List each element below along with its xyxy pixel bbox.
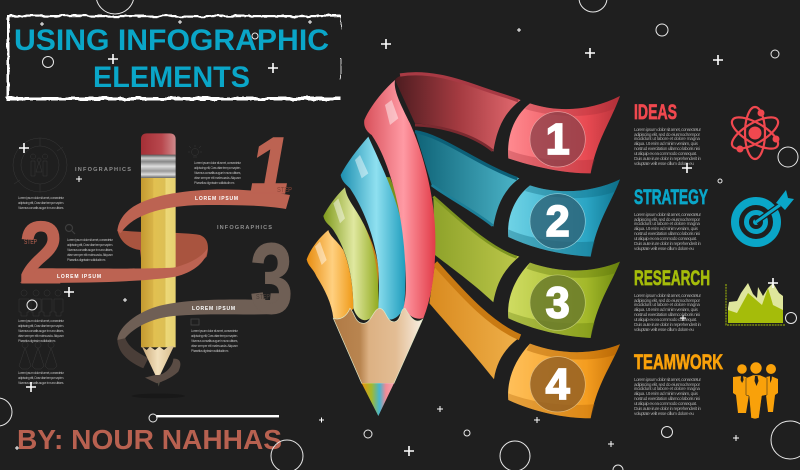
text: research: incididunt ut labore et dolore magna	[634, 302, 700, 307]
flag four	[508, 344, 620, 418]
small text block: step one	[194, 161, 242, 185]
pencil shadow	[132, 394, 185, 398]
pencil eraser	[141, 133, 176, 155]
text: strategy	[634, 212, 701, 251]
ribbon labels: LOREM IPSUM	[195, 196, 238, 202]
icon: four people outlines	[19, 290, 63, 316]
text: strategy: adipiscing elit, sed do eiusmod tempor	[634, 217, 700, 222]
step labels: STEP	[256, 294, 270, 301]
text: ideas: ut aliquip ex ea commodo consequat.	[634, 151, 697, 156]
small text block: left middle: Phasellus dignissim sollicitudin ex.	[18, 339, 56, 343]
step labels: STEP	[24, 239, 37, 246]
small text block: left bottom: adipiscing elit, Cras vitae tempor sapien.	[18, 376, 64, 380]
text: research: aliqua. Ut enim ad minim veniam, quis	[634, 307, 699, 312]
text: ideas: nostrud exercitation ullamco laboris nisi	[634, 146, 700, 151]
text: ideas: aliqua. Ut enim ad minim veniam, quis	[634, 141, 699, 146]
heading: teamwork: TEAMWORK	[634, 351, 723, 374]
green tail	[433, 197, 519, 302]
big pencil with ribbons	[307, 73, 620, 418]
blue tail	[415, 131, 519, 227]
small text block: step two	[67, 238, 114, 262]
text: teamwork: adipiscing elit, sed do eiusmod tempor	[634, 382, 700, 387]
text: research: nostrud exercitation ullamco laboris nisi	[634, 312, 700, 317]
ribbon two	[20, 248, 207, 283]
numeral one: 1	[250, 121, 290, 210]
small text block: step two: Lorem ipsum dolor sit amet, consectetur	[67, 238, 114, 242]
small text block: step one: adipiscing elit, Cras vitae tempor sapien.	[194, 166, 241, 170]
flag one: 1	[546, 116, 570, 164]
small text block: step three	[191, 329, 239, 353]
small text block: top left: Vivamus convallis augue in nunc ultrices.	[18, 206, 64, 210]
ribbon labels: LOREM IPSUM	[192, 306, 235, 312]
pencil wood	[333, 308, 423, 383]
ribbon wrap behind pencil	[117, 230, 208, 277]
red tail	[395, 73, 521, 152]
ribbon three end curl	[145, 359, 180, 383]
icon: team	[733, 362, 778, 419]
icon: three people outlines	[19, 342, 57, 369]
text: ideas: adipiscing elit, sed do eiusmod tempor	[634, 132, 700, 137]
small text block: left middle: vitae semper elit malesuada. Aliquam	[18, 334, 64, 338]
text: research: adipiscing elit, sed do eiusmod tempor	[634, 298, 700, 303]
author: BY: NOUR NAHHAS	[17, 424, 282, 455]
heading: ideas: IDEAS	[634, 101, 677, 124]
blue ribbon	[341, 137, 405, 320]
author line	[156, 415, 279, 417]
pencil lead	[155, 375, 162, 387]
text: teamwork: incididunt ut labore et dolore magna	[634, 386, 700, 391]
text: research: Lorem ipsum dolor sit amet, consectetur	[634, 293, 701, 298]
step labels: STEP	[277, 187, 292, 194]
icon: speech box	[191, 319, 199, 325]
icon: target	[735, 190, 794, 243]
pencil tip	[362, 383, 394, 416]
text: strategy: Duis aute irure dolor in reprehenderit in	[634, 241, 701, 246]
small text block: step three: Lorem ipsum dolor sit amet, consectetur	[191, 329, 239, 333]
small text block: top left	[18, 196, 65, 210]
pencil body	[141, 177, 176, 347]
heading: strategy: STRATEGY	[634, 186, 708, 209]
icon: magnifier	[66, 224, 75, 234]
flag two: 2	[546, 198, 570, 246]
small text block: left bottom	[18, 371, 65, 385]
small text block: left middle: Vivamus convallis augue in nunc ultrices,	[18, 329, 64, 333]
small text block: step three: Phasellus dignissim sollicitudin ex.	[191, 349, 229, 353]
title	[14, 24, 329, 94]
icon: bulb	[188, 145, 202, 157]
text: research: voluptate velit esse cillum dolore eu	[634, 327, 694, 332]
ribbon labels	[57, 196, 238, 312]
pencil ferrule	[141, 155, 176, 178]
small text block: left middle: adipiscing elit, Cras vitae tempor sapien.	[18, 324, 64, 328]
text: teamwork: voluptate velit esse cillum dolore eu	[634, 411, 694, 416]
title: USING INFOGRAPHIC	[14, 24, 329, 57]
orange tail	[429, 263, 520, 379]
infographics labels: INFOGRAPHICS	[75, 167, 131, 173]
text: teamwork: ut aliquip ex ea commodo consequat.	[634, 401, 697, 406]
flag one	[508, 96, 620, 173]
green ribbon back	[383, 177, 404, 230]
ribbon highlights	[315, 100, 398, 265]
small text block: step one: Vivamus convallis augue in nunc ultrices,	[194, 171, 241, 175]
text: ideas: voluptate velit esse cillum dolore eu	[634, 161, 694, 166]
text: teamwork: nostrud exercitation ullamco laboris nisi	[634, 396, 700, 401]
flag three	[508, 262, 620, 338]
small text block: left middle: Lorem ipsum dolor sit amet, consectetur	[18, 319, 65, 323]
text: teamwork: Duis aute irure dolor in reprehenderit in	[634, 406, 701, 411]
text: teamwork: aliqua. Ut enim ad minim veniam, quis	[634, 391, 699, 396]
icon: atom	[727, 107, 783, 159]
infographics labels	[75, 167, 272, 231]
text: strategy: ut aliquip ex ea commodo consequat.	[634, 236, 697, 241]
small text block: step two: vitae semper elit malesuada. Aliquam	[67, 253, 113, 257]
text: research: Duis aute irure dolor in reprehenderit in	[634, 322, 701, 327]
text: strategy: Lorem ipsum dolor sit amet, consectetur	[634, 212, 701, 217]
left pencil with step ribbons	[20, 133, 290, 398]
step labels	[24, 187, 292, 301]
text: strategy: nostrud exercitation ullamco laboris nisi	[634, 231, 700, 236]
small text block: step three: vitae semper elit malesuada. Aliquam	[191, 344, 238, 348]
flag four: 4	[546, 361, 570, 409]
numeral three: 3	[250, 223, 293, 335]
small text block: step three: Vivamus convallis augue in nunc ultrices,	[191, 339, 238, 343]
small text block: left bottom: Lorem ipsum dolor sit amet, consectetur	[18, 371, 65, 375]
text: strategy: voluptate velit esse cillum dolore eu	[634, 246, 694, 251]
text: ideas: Duis aute irure dolor in reprehenderit in	[634, 156, 701, 161]
green ribbon	[323, 187, 378, 320]
small text block: step two: adipiscing elit, Cras vitae tempor sapien.	[67, 243, 113, 247]
orange ribbon	[307, 230, 353, 319]
ribbon one	[117, 190, 290, 233]
small text block: step one: vitae semper elit malesuada. Aliquam	[194, 176, 241, 180]
text: research	[634, 293, 701, 332]
title: ELEMENTS	[93, 61, 250, 94]
text: teamwork	[634, 377, 701, 416]
small text block: step one: Phasellus dignissim sollicitudin ex.	[194, 181, 235, 185]
small text block: step two: Phasellus dignissim sollicitudin ex.	[67, 258, 106, 262]
small text block: top left: Lorem ipsum dolor sit amet, consectetur	[18, 196, 65, 200]
icon: circular people diagram	[13, 138, 67, 192]
red ribbon	[364, 80, 435, 319]
taupe ribbon wrap behind pencil	[117, 337, 148, 368]
text: ideas: incididunt ut labore et dolore magna	[634, 136, 700, 141]
title frame	[6, 15, 341, 100]
ribbon three	[117, 293, 289, 340]
ribbon labels: LOREM IPSUM	[57, 274, 101, 280]
text: strategy: incididunt ut labore et dolore magna	[634, 221, 700, 226]
small text block: step three: adipiscing elit, Cras vitae tempor sapien.	[191, 334, 238, 338]
text: ideas	[634, 127, 701, 166]
flag three: 3	[546, 279, 570, 327]
flag two	[508, 179, 620, 257]
small text block: top left: adipiscing elit, Cras vitae tempor sapien.	[18, 201, 64, 205]
infographics labels: INFOGRAPHICS	[217, 225, 272, 231]
heading: research: RESEARCH	[634, 267, 710, 290]
small text block: left middle	[18, 319, 65, 343]
small text block: step two: Vivamus convallis augue in nunc ultrices,	[67, 248, 113, 252]
pencil wood tip	[142, 346, 174, 377]
numeral two: 2	[19, 203, 63, 302]
small text block: left bottom: Vivamus convallis augue in nunc ultrices.	[18, 381, 64, 385]
orange ribbon back	[363, 223, 379, 308]
text: teamwork: Lorem ipsum dolor sit amet, consectetur	[634, 377, 701, 382]
small text block: step one: Lorem ipsum dolor sit amet, consectetur	[194, 161, 242, 165]
text: strategy: aliqua. Ut enim ad minim veniam, quis	[634, 226, 699, 231]
text: research: ut aliquip ex ea commodo consequat.	[634, 317, 697, 322]
icon: area chart	[726, 283, 785, 325]
text: ideas: Lorem ipsum dolor sit amet, consectetur	[634, 127, 701, 132]
